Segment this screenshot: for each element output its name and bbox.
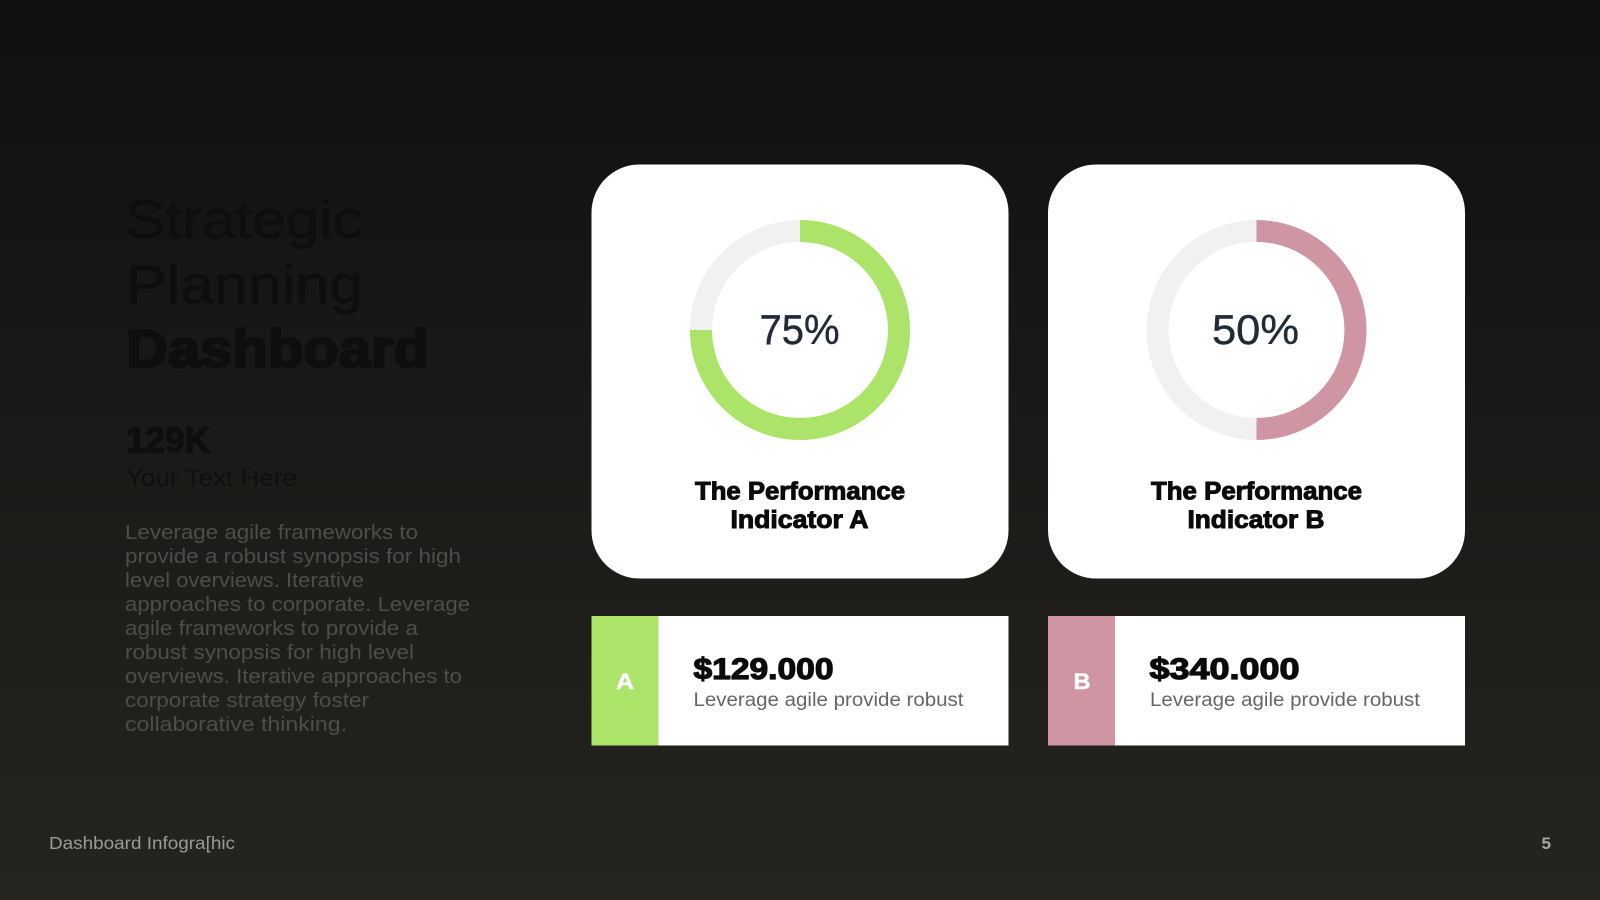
body paragraph: collaborative thinking. — [125, 713, 347, 736]
accent tab B — [1048, 616, 1115, 746]
card title A: The Performance — [695, 478, 905, 506]
panel: indicator B card — [1048, 164, 1465, 578]
tab letter A: A — [616, 669, 634, 694]
card background A — [592, 164, 1008, 578]
body paragraph: Leverage agile frameworks to — [125, 521, 418, 544]
accent tab A — [592, 616, 658, 746]
donut value A: 75% — [760, 306, 840, 353]
title — [125, 190, 429, 379]
card title B: Indicator B — [1188, 506, 1324, 534]
bar background B — [1048, 616, 1465, 746]
title: Planning — [126, 255, 363, 315]
page number: 5 — [1542, 835, 1551, 853]
panel: value bar A — [592, 616, 1008, 746]
card title A — [695, 478, 905, 534]
stat: 129K: 129K — [126, 421, 210, 460]
caption B: Leverage agile provide robust — [1150, 690, 1421, 711]
caption A: Leverage agile provide robust — [694, 690, 964, 711]
body paragraph — [125, 521, 470, 736]
body paragraph: corporate strategy foster — [125, 689, 369, 712]
stat label: Your Text Here — [126, 465, 297, 492]
bar background A — [592, 616, 1008, 746]
body paragraph: level overviews. Iterative — [125, 569, 364, 592]
body paragraph: overviews. Iterative approaches to — [125, 665, 462, 688]
value B: $340.000 — [1150, 653, 1300, 686]
panel: indicator A card — [592, 164, 1008, 578]
body paragraph: agile frameworks to provide a — [125, 617, 419, 640]
body paragraph: provide a robust synopsis for high — [125, 545, 461, 568]
footer label: Dashboard Infogra[hic — [49, 833, 235, 853]
tab letter B: B — [1074, 669, 1090, 694]
card title A: Indicator A — [730, 506, 868, 534]
title: Dashboard — [126, 319, 429, 379]
body paragraph: robust synopsis for high level — [125, 641, 414, 664]
card title B: The Performance — [1151, 478, 1362, 506]
panel: value bar B — [1048, 616, 1465, 746]
donut value B: 50% — [1212, 306, 1299, 353]
value A: $129.000 — [694, 653, 834, 686]
card title B — [1151, 478, 1362, 534]
donut chart A: 75% — [701, 231, 899, 429]
card background B — [1048, 164, 1465, 578]
donut chart B: 50% — [1158, 231, 1356, 429]
title: Strategic — [125, 190, 363, 250]
body paragraph: approaches to corporate. Leverage — [125, 593, 470, 616]
